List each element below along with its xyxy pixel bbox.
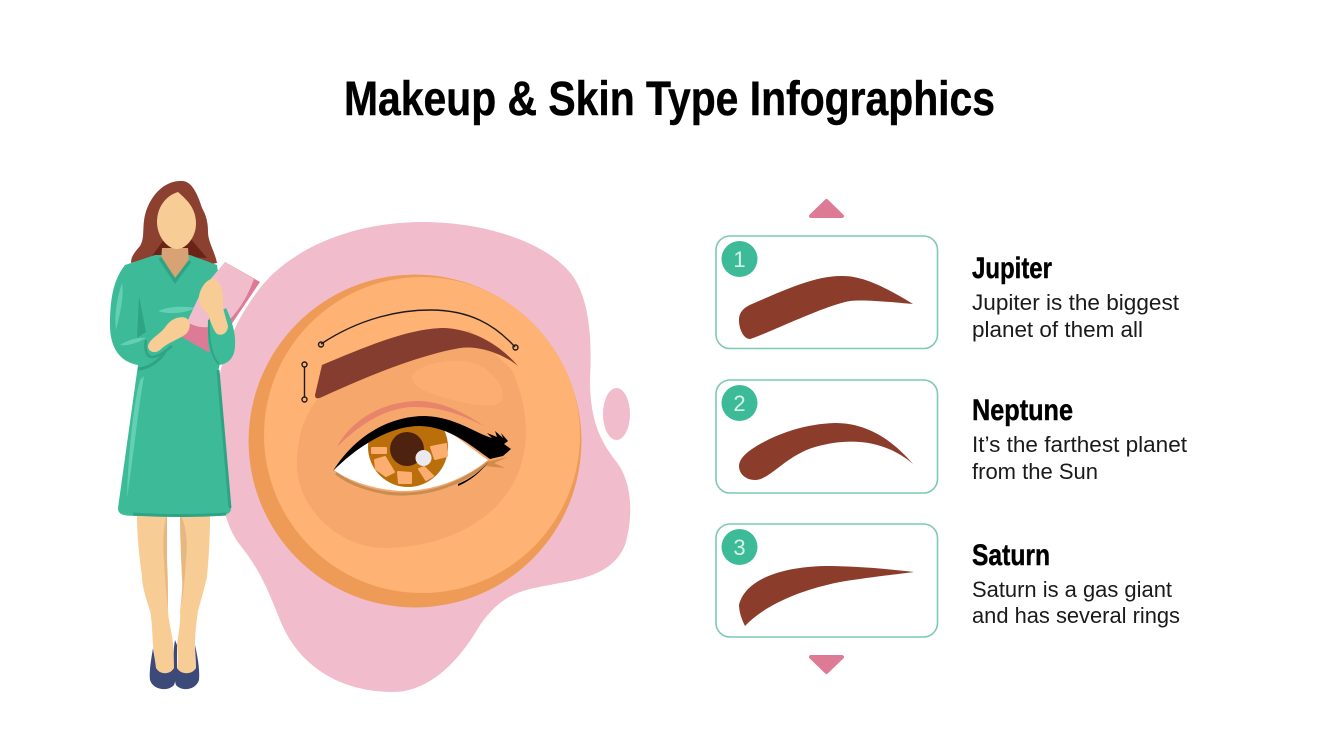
title: Makeup & Skin Type Infographics (344, 73, 995, 126)
top arrow (811, 201, 842, 216)
face circle (248, 274, 582, 608)
text: Saturn (972, 539, 1180, 628)
small pink oval (603, 388, 630, 440)
text: Saturn: Saturn (972, 539, 1050, 572)
eyebrow 2 (739, 423, 913, 480)
card 2: 2 (733, 391, 746, 416)
dress highlights (115, 283, 196, 498)
text: Neptune (972, 394, 1188, 484)
text: Jupiter: Jupiter (972, 252, 1052, 285)
bottom arrow (811, 657, 842, 672)
text: Jupiter: planet of them all (972, 317, 1143, 342)
text: Neptune: Neptune (972, 394, 1073, 427)
hands (148, 279, 228, 352)
card 2 (716, 380, 938, 493)
dress body (110, 255, 231, 516)
woman figure (110, 181, 260, 689)
folder (180, 262, 260, 352)
card 3 (716, 524, 938, 637)
pink blob background (215, 222, 630, 692)
card 1: 1 (733, 247, 746, 272)
card 3: 3 (733, 535, 746, 560)
card 1 (716, 236, 938, 348)
text: Saturn: Saturn is a gas giant (972, 577, 1173, 602)
text: Jupiter: Jupiter is the biggest (972, 290, 1180, 315)
face (157, 192, 196, 249)
eyebrow arc guide (302, 310, 518, 402)
eyebrow 3 (739, 566, 914, 626)
text: Neptune: from the Sun (972, 459, 1098, 484)
hair (131, 181, 217, 274)
right sleeve (208, 308, 235, 365)
text: Jupiter (972, 252, 1180, 342)
shoes (150, 640, 177, 689)
eyebrow 1 (739, 276, 913, 339)
text: Neptune: It’s the farthest planet (972, 432, 1188, 457)
illustration: eye on pink blob (215, 222, 630, 692)
main eyebrow (315, 328, 518, 398)
eye (333, 401, 511, 494)
text: Saturn: and has several rings (972, 603, 1180, 628)
neck and collar (161, 248, 189, 278)
legs (137, 514, 174, 678)
dress shading (133, 352, 230, 516)
